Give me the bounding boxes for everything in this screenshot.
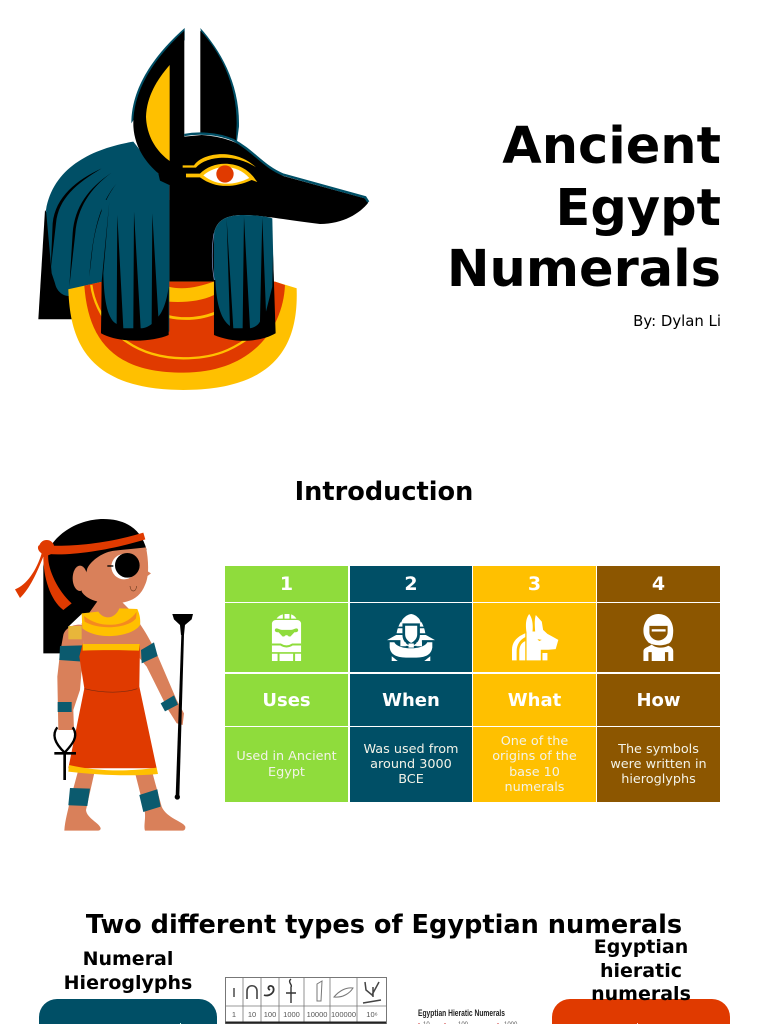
column 3: what: What bbox=[508, 690, 561, 710]
neck and necklace bbox=[82, 600, 141, 644]
right arm bbox=[138, 622, 184, 725]
chart: hieroglyph numeral table bbox=[225, 977, 387, 1024]
dress bbox=[68, 643, 157, 768]
column 4: how: 4 bbox=[652, 573, 665, 595]
text: hieratic numerals caption bbox=[418, 1008, 518, 1024]
column 1: uses: Used in Ancient Egypt bbox=[236, 749, 337, 780]
icon: Egyptian woman bbox=[15, 519, 193, 831]
icon: Anubis head bbox=[38, 28, 370, 390]
heading: numeral hieroglyphs: Numeral Hieroglyphs bbox=[64, 948, 192, 994]
column 3: what: 3 bbox=[528, 573, 541, 595]
collar bbox=[68, 282, 297, 390]
chart: hieroglyph numeral table: 10000 bbox=[307, 1010, 327, 1019]
column 1: uses: Uses bbox=[262, 690, 311, 710]
heading: introduction: Introduction bbox=[295, 477, 473, 507]
text: hieratic numerals caption: Egyptian Hieratic Numerals bbox=[418, 1008, 505, 1018]
chart: hieroglyph numeral table: 10⁶ bbox=[366, 1010, 378, 1019]
title: Numerals bbox=[447, 240, 721, 299]
title: Ancient bbox=[502, 117, 721, 176]
column 1: uses bbox=[225, 566, 348, 802]
table: introduction grid bbox=[225, 566, 720, 802]
panel: hieroglyph box bbox=[39, 999, 217, 1024]
title: Egypt bbox=[556, 178, 721, 238]
headband bbox=[15, 533, 145, 610]
chart: hieroglyph numeral table: 10 bbox=[248, 1010, 256, 1019]
ankh bbox=[54, 727, 75, 753]
face bbox=[73, 566, 87, 591]
column 4: how bbox=[597, 566, 720, 802]
column 2: when: 2 bbox=[404, 573, 418, 595]
heading: two types: Two different types of Egyptian numerals bbox=[86, 910, 682, 940]
heading: Egyptian hieratic numerals: Egyptian hieratic numerals bbox=[591, 936, 691, 1005]
title bbox=[447, 117, 721, 299]
chart: hieroglyph numeral table: 1 bbox=[232, 1010, 236, 1019]
gold hair tube bbox=[68, 626, 82, 639]
column 3: what bbox=[473, 566, 596, 802]
column 2: when bbox=[350, 566, 472, 802]
column 1: uses: 1 bbox=[280, 573, 293, 595]
byline: By: Dylan Li bbox=[633, 312, 721, 330]
panel: hieratic box bbox=[552, 999, 730, 1024]
legs bbox=[64, 770, 101, 831]
chart: hieroglyph numeral table: 1000 bbox=[283, 1010, 300, 1019]
chart: hieroglyph numeral table: 100000 bbox=[331, 1010, 356, 1019]
column 3: what: One of the origins of the base 10 numerals bbox=[492, 734, 577, 795]
column 2: when: When bbox=[382, 690, 440, 710]
staff bbox=[172, 614, 193, 635]
column 4: how: How bbox=[636, 690, 681, 710]
column 4: how: The symbols were written in hieroglyphs bbox=[610, 742, 707, 787]
left lock bbox=[102, 200, 169, 332]
column 2: when: Was used from around 3000 BCE bbox=[363, 742, 459, 787]
left arm bbox=[57, 625, 83, 730]
chart: hieroglyph numeral table: 100 bbox=[264, 1010, 276, 1019]
right lock bbox=[214, 215, 275, 333]
